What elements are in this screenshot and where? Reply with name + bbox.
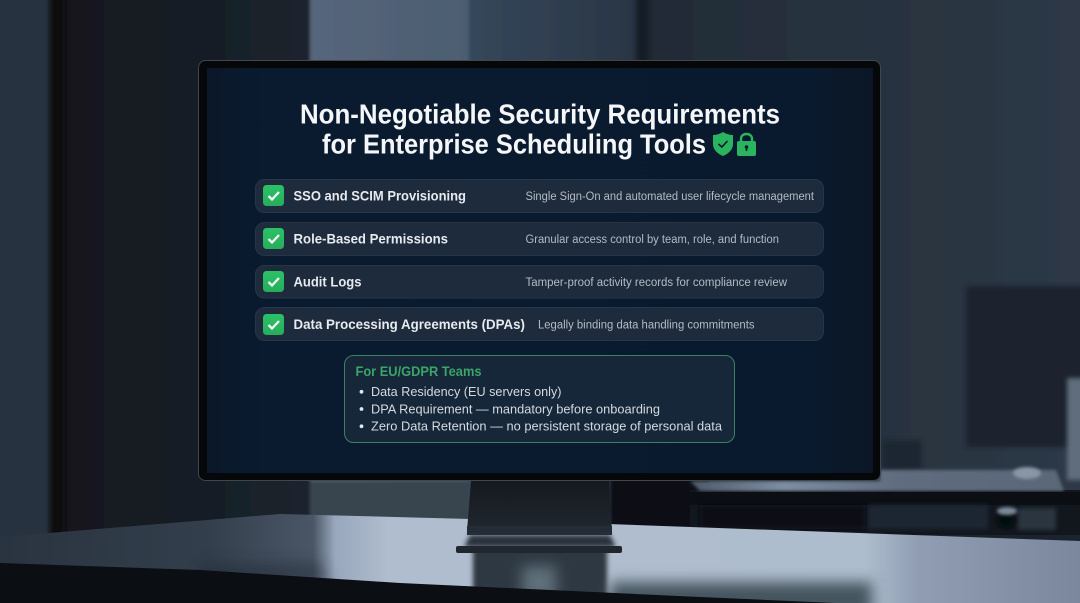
- title: [300, 98, 780, 160]
- row: Audit Logs: [256, 266, 824, 298]
- callout: EU/GDPR teams: [344, 356, 734, 442]
- description: Single Sign-On and automated user lifecycle management: [526, 191, 815, 203]
- description: Tamper-proof activity records for compliance review: [526, 277, 788, 289]
- icon: lock: [737, 134, 756, 156]
- description: Granular access control by team, role, and function: [526, 234, 779, 246]
- title: for Enterprise Scheduling Tools: [322, 128, 706, 160]
- requirement name: Data Processing Agreements (DPAs): [294, 316, 525, 332]
- callout list: Zero Data Retention — no persistent storage of personal data: [371, 418, 723, 434]
- callout heading: For EU/GDPR Teams: [356, 363, 482, 379]
- foreground table: [0, 514, 1080, 603]
- icon: shield: [713, 132, 733, 156]
- callout list: Data Residency (EU servers only): [371, 384, 562, 399]
- description: Legally binding data handling commitments: [538, 320, 755, 332]
- title: Non-Negotiable Security Requirements: [300, 98, 780, 130]
- background box: [882, 440, 922, 470]
- requirement name: Role-Based Permissions: [294, 230, 448, 246]
- callout list: [360, 384, 723, 434]
- callout list: DPA Requirement — mandatory before onboarding: [371, 401, 660, 416]
- icon: check: [263, 185, 284, 206]
- row: Data Processing Agreements: [256, 308, 824, 340]
- icon: check: [263, 271, 284, 292]
- requirement name: Audit Logs: [294, 274, 362, 290]
- background mouse: [1013, 467, 1041, 479]
- background desk: [690, 470, 1080, 535]
- row: SSO and SCIM Provisioning: [256, 180, 824, 212]
- row: Role-Based Permissions: [256, 222, 824, 256]
- icon: check: [263, 314, 284, 335]
- stand reflection: [473, 548, 607, 600]
- background device: [1067, 378, 1080, 480]
- icon: check: [263, 228, 284, 249]
- screen: [207, 68, 873, 473]
- stand base: [456, 546, 622, 553]
- monitor reflection: [610, 582, 872, 603]
- monitor: [198, 60, 880, 480]
- requirement name: SSO and SCIM Provisioning: [294, 188, 466, 204]
- table front edge: [0, 563, 880, 603]
- monitor stand: [456, 481, 622, 553]
- left table shadow: [200, 563, 330, 584]
- blurred background monitor: [966, 286, 1080, 447]
